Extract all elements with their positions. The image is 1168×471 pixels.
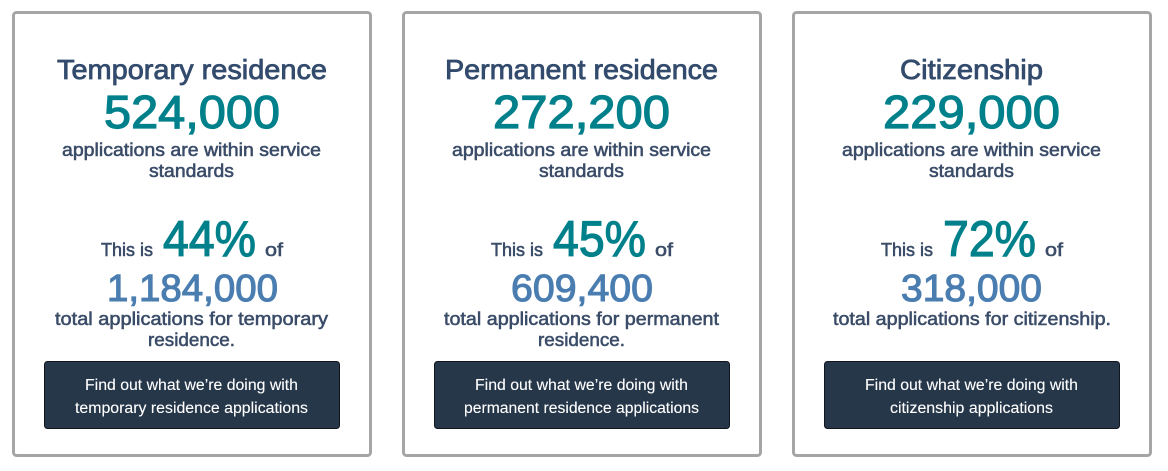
- text: within standards description: standards: [149, 161, 234, 181]
- button: citizenship link: citizenship applications: [890, 400, 1053, 417]
- percentage line: [491, 211, 674, 267]
- heading: permanent residence: Permanent residence: [445, 54, 718, 85]
- percentage line: 44%: [163, 211, 256, 267]
- button: temporary residence link: temporary residence applications: [75, 400, 308, 417]
- text: within standards description: standards: [539, 161, 624, 181]
- button: temporary residence link: Find out what we’re doing with: [85, 377, 298, 394]
- number: total applications: 609,400: [511, 268, 653, 310]
- percentage line: 72%: [943, 211, 1036, 267]
- heading: temporary residence: Temporary residence: [57, 54, 327, 85]
- text: within standards description: [842, 140, 1101, 181]
- button: permanent residence link: permanent residence applications: [464, 400, 699, 417]
- percentage line: This is: [491, 240, 543, 260]
- panel: permanent residence: [404, 12, 760, 456]
- percentage line: of: [1045, 240, 1064, 260]
- button: citizenship link: Find out what we’re doing with: [865, 377, 1078, 394]
- text: total description: [444, 309, 719, 350]
- percentage line: [881, 211, 1064, 267]
- button: permanent residence link: Find out what we’re doing with: [475, 377, 688, 394]
- text: within standards description: [452, 140, 711, 181]
- text: within standards description: applications are within service: [842, 140, 1101, 160]
- text: total description: total applications for citizenship.: [833, 309, 1111, 329]
- heading: citizenship: Citizenship: [900, 54, 1043, 85]
- button: citizenship link: [824, 362, 1120, 428]
- percentage line: [101, 211, 284, 267]
- button: temporary residence link: [44, 362, 340, 428]
- number: within standards: 272,200: [493, 86, 670, 138]
- text: within standards description: [62, 140, 321, 181]
- text: total description: total applications for temporary: [55, 309, 328, 329]
- text: total description: [55, 309, 328, 350]
- text: total description: residence.: [538, 330, 625, 350]
- percentage line: of: [655, 240, 674, 260]
- percentage line: This is: [101, 240, 153, 260]
- percentage line: 45%: [553, 211, 646, 267]
- number: within standards: 229,000: [883, 86, 1060, 138]
- number: within standards: 524,000: [104, 86, 280, 138]
- text: within standards description: applications are within service: [62, 140, 321, 160]
- percentage line: This is: [881, 240, 933, 260]
- text: within standards description: standards: [929, 161, 1014, 181]
- percentage line: of: [265, 240, 284, 260]
- number: total applications: 318,000: [901, 268, 1042, 310]
- panel: temporary residence: [14, 12, 370, 456]
- number: total applications: 1,184,000: [107, 268, 278, 310]
- text: total description: residence.: [148, 330, 235, 350]
- button: permanent residence link: [434, 362, 730, 428]
- text: within standards description: applications are within service: [452, 140, 711, 160]
- panel: citizenship: [794, 12, 1150, 456]
- text: total description: total applications for permanent: [444, 309, 719, 329]
